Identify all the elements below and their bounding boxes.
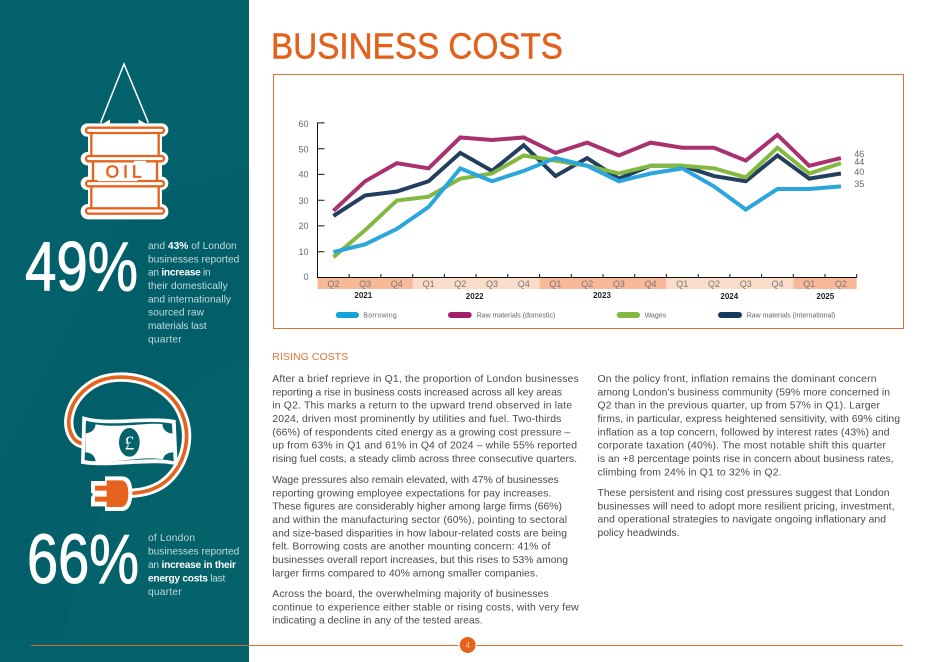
chart: end value labels: 46	[854, 149, 864, 159]
chart: quarter labels: Q3	[359, 279, 371, 289]
chart: end value labels	[854, 149, 864, 189]
text: right column	[598, 374, 900, 539]
text: energy costs stat description: businesses reported	[148, 547, 240, 558]
text: raw materials stat description	[148, 241, 240, 345]
text: left column: businesses overall report increases, but this rises to 53% among	[272, 555, 568, 566]
text: raw materials stat description: their domestically	[148, 281, 229, 292]
chart: quarter labels: Q1	[676, 279, 688, 289]
chart: legend: Borrowing	[363, 312, 397, 320]
chart: quarter labels: Q2	[327, 279, 339, 289]
text: right column: and operational strategies to navigate ongoing inflationary and	[598, 515, 886, 526]
text: left column: reporting a rise in business costs increased across all key areas	[272, 387, 562, 398]
stat: 66%: 66%	[27, 520, 139, 598]
text: energy costs stat description	[148, 533, 240, 598]
chart: quarter labels: Q4	[771, 279, 784, 289]
text: right column: Q2 than in the previous quarter, up from 57% in Q1). Larger	[598, 401, 881, 412]
text: raw materials stat description: quarter	[148, 334, 182, 345]
text: left column	[272, 374, 579, 627]
panel: line chart frame	[274, 74, 904, 328]
chart: legend: Wages	[645, 312, 667, 320]
chart: quarter labels: Q2	[835, 279, 847, 289]
chart: y axis labels	[298, 119, 309, 282]
text: left column: up from 63% in Q1 and 61% in Q4 of 2024 – while 55% reported	[272, 441, 577, 452]
chart: y axis labels: 60	[298, 119, 309, 129]
text: left column: in Q2. This marks a return to the upward trend observed in late	[272, 401, 572, 412]
chart: y axis labels: 20	[298, 221, 309, 231]
text: raw materials stat description: materials last	[148, 321, 207, 332]
text: raw materials stat description: an increase in	[148, 268, 211, 279]
chart: end value labels: 35	[854, 179, 864, 189]
heading: rising costs: RISING COSTS	[272, 351, 348, 363]
chart: end value labels: 44	[854, 157, 864, 167]
text: left column: 2024, driven most prominently by utilities and fuel. Two-thirds	[272, 414, 561, 425]
chart: legend: Raw materials (domestic)	[477, 312, 555, 320]
chart: quarter labels	[327, 279, 847, 289]
chart: year labels: 2024	[720, 292, 739, 301]
chart: year labels: 2022	[466, 292, 484, 301]
chart: y axis labels: 10	[298, 247, 309, 257]
text: raw materials stat description: and 43% of London	[148, 241, 237, 252]
text: right column: corporate taxation (40%). The most notable shift this quarter	[598, 441, 887, 452]
text: raw materials stat description: sourced raw	[148, 308, 205, 319]
icon: plug and banknote	[69, 377, 187, 511]
chart: y axis labels: 50	[298, 144, 309, 154]
text: left column: Wage pressures also remain elevated, with 47% of businesses	[272, 475, 559, 486]
text: left column: continue to experience either stable or rising costs, with very few	[272, 602, 579, 613]
text: right column: These persistent and rising cost pressures suggest that London	[598, 488, 890, 499]
icon: plug and banknote: £	[124, 433, 134, 455]
chart: quarter labels: Q4	[391, 279, 403, 289]
text: left column: (66%) of respondents cited energy as a growing cost pressure –	[272, 427, 571, 438]
text: right column: among London's business community (59% more concerned in	[598, 387, 890, 398]
icon: oil barrel: OIL	[106, 161, 142, 181]
chart: quarter labels: Q1	[423, 279, 435, 289]
text: right column: On the policy front, inflation remains the dominant concern	[598, 374, 877, 385]
text: right column: firms, in particular, express heightened sensitivity, with 69% citing	[598, 414, 900, 425]
chart: y axis labels: 30	[298, 196, 309, 206]
panel: left sidebar	[0, 0, 249, 662]
chart: end value labels: 40	[854, 167, 864, 177]
text: raw materials stat description: and internationally	[148, 294, 232, 305]
text: energy costs stat description: an increase in their	[148, 560, 236, 571]
chart: quarter labels: Q2	[581, 279, 593, 289]
stat: 49%: 49%	[25, 228, 138, 306]
chart: quarter labels: Q3	[486, 279, 498, 289]
text: right column: climbing from 24% in Q1 to 32% in Q2.	[598, 467, 782, 478]
title: BUSINESS COSTS	[271, 26, 563, 66]
text: left column: larger firms compared to 40% among smaller companies.	[272, 568, 538, 579]
chart: quarter labels: Q2	[454, 279, 466, 289]
chart: data lines	[333, 135, 841, 257]
chart: legend: Raw materials (international)	[747, 312, 835, 320]
chart: quarter labels: Q3	[740, 279, 752, 289]
text: right column: is an +8 percentage points rise in concern about business rates,	[598, 454, 894, 465]
text: left column: and size-based disparities in how labour-related costs are being	[272, 528, 567, 539]
text: energy costs stat description: of London	[148, 533, 195, 544]
text: left column: rising fuel costs, a steady climb across three consecutive quarters.	[272, 454, 577, 465]
chart: year labels	[354, 291, 835, 301]
chart: legend	[336, 312, 835, 320]
chart: quarter bands	[318, 278, 857, 289]
text: left column: After a brief reprieve in Q1, the proportion of London businesses	[272, 374, 579, 385]
chart: quarter labels: Q4	[518, 279, 530, 289]
chart: quarter labels: Q3	[613, 279, 625, 289]
text: energy costs stat description: quarter	[148, 587, 182, 598]
text: left column: reporting growing employee expectations for pay increases.	[272, 488, 551, 499]
text: right column: policy headwinds.	[598, 528, 680, 539]
text: left column: indicating a decline in any of the tested areas.	[272, 616, 483, 627]
chart: year labels: 2023	[593, 291, 611, 300]
chart: axes	[318, 122, 857, 278]
icon: oil barrel	[81, 64, 168, 219]
text: left column: felt. Borrowing costs are another mounting concern: 41% of	[272, 542, 550, 553]
chart: year labels: 2025	[816, 292, 835, 301]
footer rule and page number: 4	[465, 641, 470, 650]
footer rule and page number	[31, 637, 903, 653]
text: left column: and within the manufacturing sector (60%), pointing to sectoral	[272, 515, 567, 526]
chart: quarter labels: Q1	[803, 279, 815, 289]
chart: year labels: 2021	[354, 291, 373, 300]
text: right column: inflation as a top concern, followed by interest rates (43%) and	[598, 427, 890, 438]
text: left column: Across the board, the overwhelming majority of businesses	[272, 589, 549, 600]
chart: y axis labels: 0	[304, 272, 309, 282]
chart: quarter labels: Q1	[549, 279, 561, 289]
chart: quarter labels: Q4	[645, 279, 657, 289]
chart: y axis labels: 40	[298, 170, 309, 180]
text: energy costs stat description: energy costs last	[148, 573, 225, 584]
text: raw materials stat description: businesses reported	[148, 254, 240, 265]
chart: quarter labels: Q2	[708, 279, 720, 289]
text: right column: businesses will need to adopt more resilient pricing, investment,	[598, 501, 894, 512]
text: left column: These figures are considerably higher among large firms (66%)	[272, 502, 562, 513]
